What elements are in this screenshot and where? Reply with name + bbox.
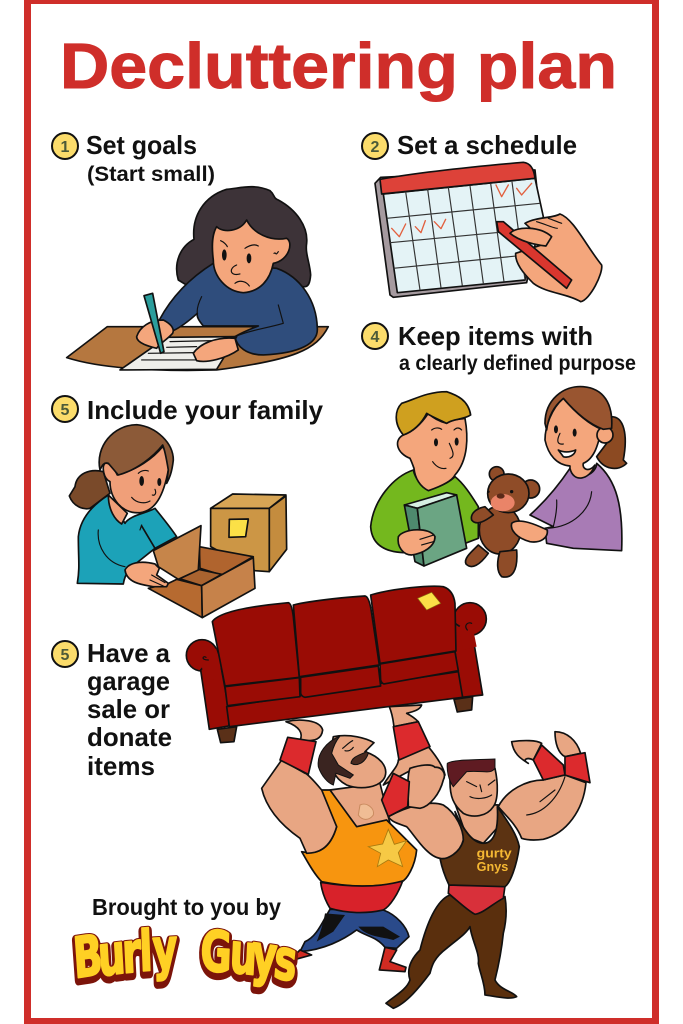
illustration: red sofa held overhead bbox=[186, 586, 486, 743]
logo: Burly Guys: BurlyGuys bbox=[71, 917, 300, 996]
logo: Burly Guys: BurlyGuys bbox=[71, 920, 300, 999]
step 5: garage sale heading: 5 bbox=[61, 647, 70, 664]
step 5: garage sale heading: Have a bbox=[87, 638, 171, 668]
step 4: keep items heading: Keep items with bbox=[398, 321, 593, 351]
step 5: include your family heading: Include your family bbox=[87, 395, 324, 425]
step 4: keep items heading: 4 bbox=[371, 329, 380, 346]
step 4: keep items heading: a clearly defined purpose bbox=[399, 352, 636, 375]
step 5: include your family heading: 5 bbox=[61, 402, 70, 419]
step 1: set goals heading: Set goals bbox=[86, 130, 197, 160]
step 1: set goals heading: 1 bbox=[61, 139, 70, 156]
step 5: garage sale heading: garage bbox=[87, 666, 170, 696]
step 5: garage sale heading: donate bbox=[87, 722, 172, 752]
step 1: set goals heading: (Start small) bbox=[87, 163, 215, 186]
step 2: set a schedule heading: Set a schedule bbox=[397, 130, 577, 160]
left strongman bbox=[262, 705, 445, 972]
right strongman bbox=[382, 732, 590, 1008]
illustration: two muscle men lifting bbox=[262, 705, 590, 1008]
illustration: woman writing at desk bbox=[67, 187, 328, 370]
right strongman: Gnys bbox=[477, 860, 508, 874]
step 2: set a schedule heading: 2 bbox=[371, 139, 380, 156]
illustration: boy with book and woman with teddy bear bbox=[371, 387, 627, 577]
step 1: set goals heading bbox=[52, 130, 215, 186]
illustration: calendar with hand and red crayon bbox=[375, 162, 602, 302]
illustration: woman packing cardboard boxes bbox=[69, 425, 287, 618]
step 4: keep items heading bbox=[362, 321, 636, 375]
right strongman: gurty bbox=[477, 847, 512, 861]
brought to you by text: Brought to you by bbox=[92, 894, 281, 920]
step 5: garage sale heading: sale or bbox=[87, 694, 170, 724]
title: Decluttering plan bbox=[60, 30, 617, 102]
step 5: garage sale heading bbox=[52, 638, 172, 781]
step 5: garage sale heading: items bbox=[87, 751, 155, 781]
